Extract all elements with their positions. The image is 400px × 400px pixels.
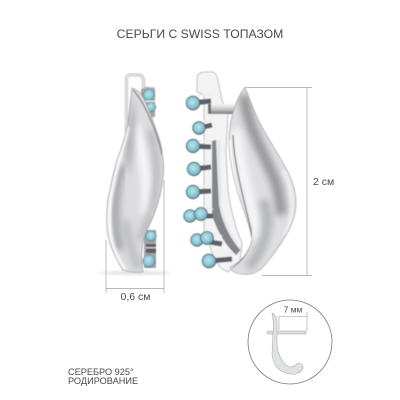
inner dark channel: [212, 140, 241, 255]
shadow under earrings: [99, 271, 171, 275]
hook: [126, 75, 155, 132]
left earring (side view): [106, 73, 164, 274]
pin: [266, 331, 306, 334]
material text: СЕРЕБРО 925°: [68, 367, 134, 377]
gemstones: [184, 96, 216, 268]
title: СЕРЬГИ С SWISS ТОПАЗОМ: [117, 27, 283, 41]
material text: РОДИРОВАНИЕ: [68, 376, 138, 386]
label: 0,6 см: 0,6 см: [121, 291, 150, 303]
clasp: [272, 313, 303, 374]
label: 7 мм: 7 мм: [284, 304, 303, 314]
leaf body: [108, 88, 164, 272]
right earring (front view): [184, 72, 305, 280]
hook: [197, 72, 242, 272]
pin: [208, 104, 235, 114]
dimension: height 2 см: [246, 88, 312, 276]
stone settings: [190, 101, 232, 261]
bottom stones: [143, 230, 156, 268]
leaf body: [230, 88, 296, 274]
top stones: [141, 89, 156, 117]
clasp detail circle: [248, 300, 332, 384]
dimension: 7 мм: [279, 312, 307, 331]
label: 2 см: 2 см: [313, 176, 334, 188]
dimension: width 0,6 см: [106, 180, 164, 293]
